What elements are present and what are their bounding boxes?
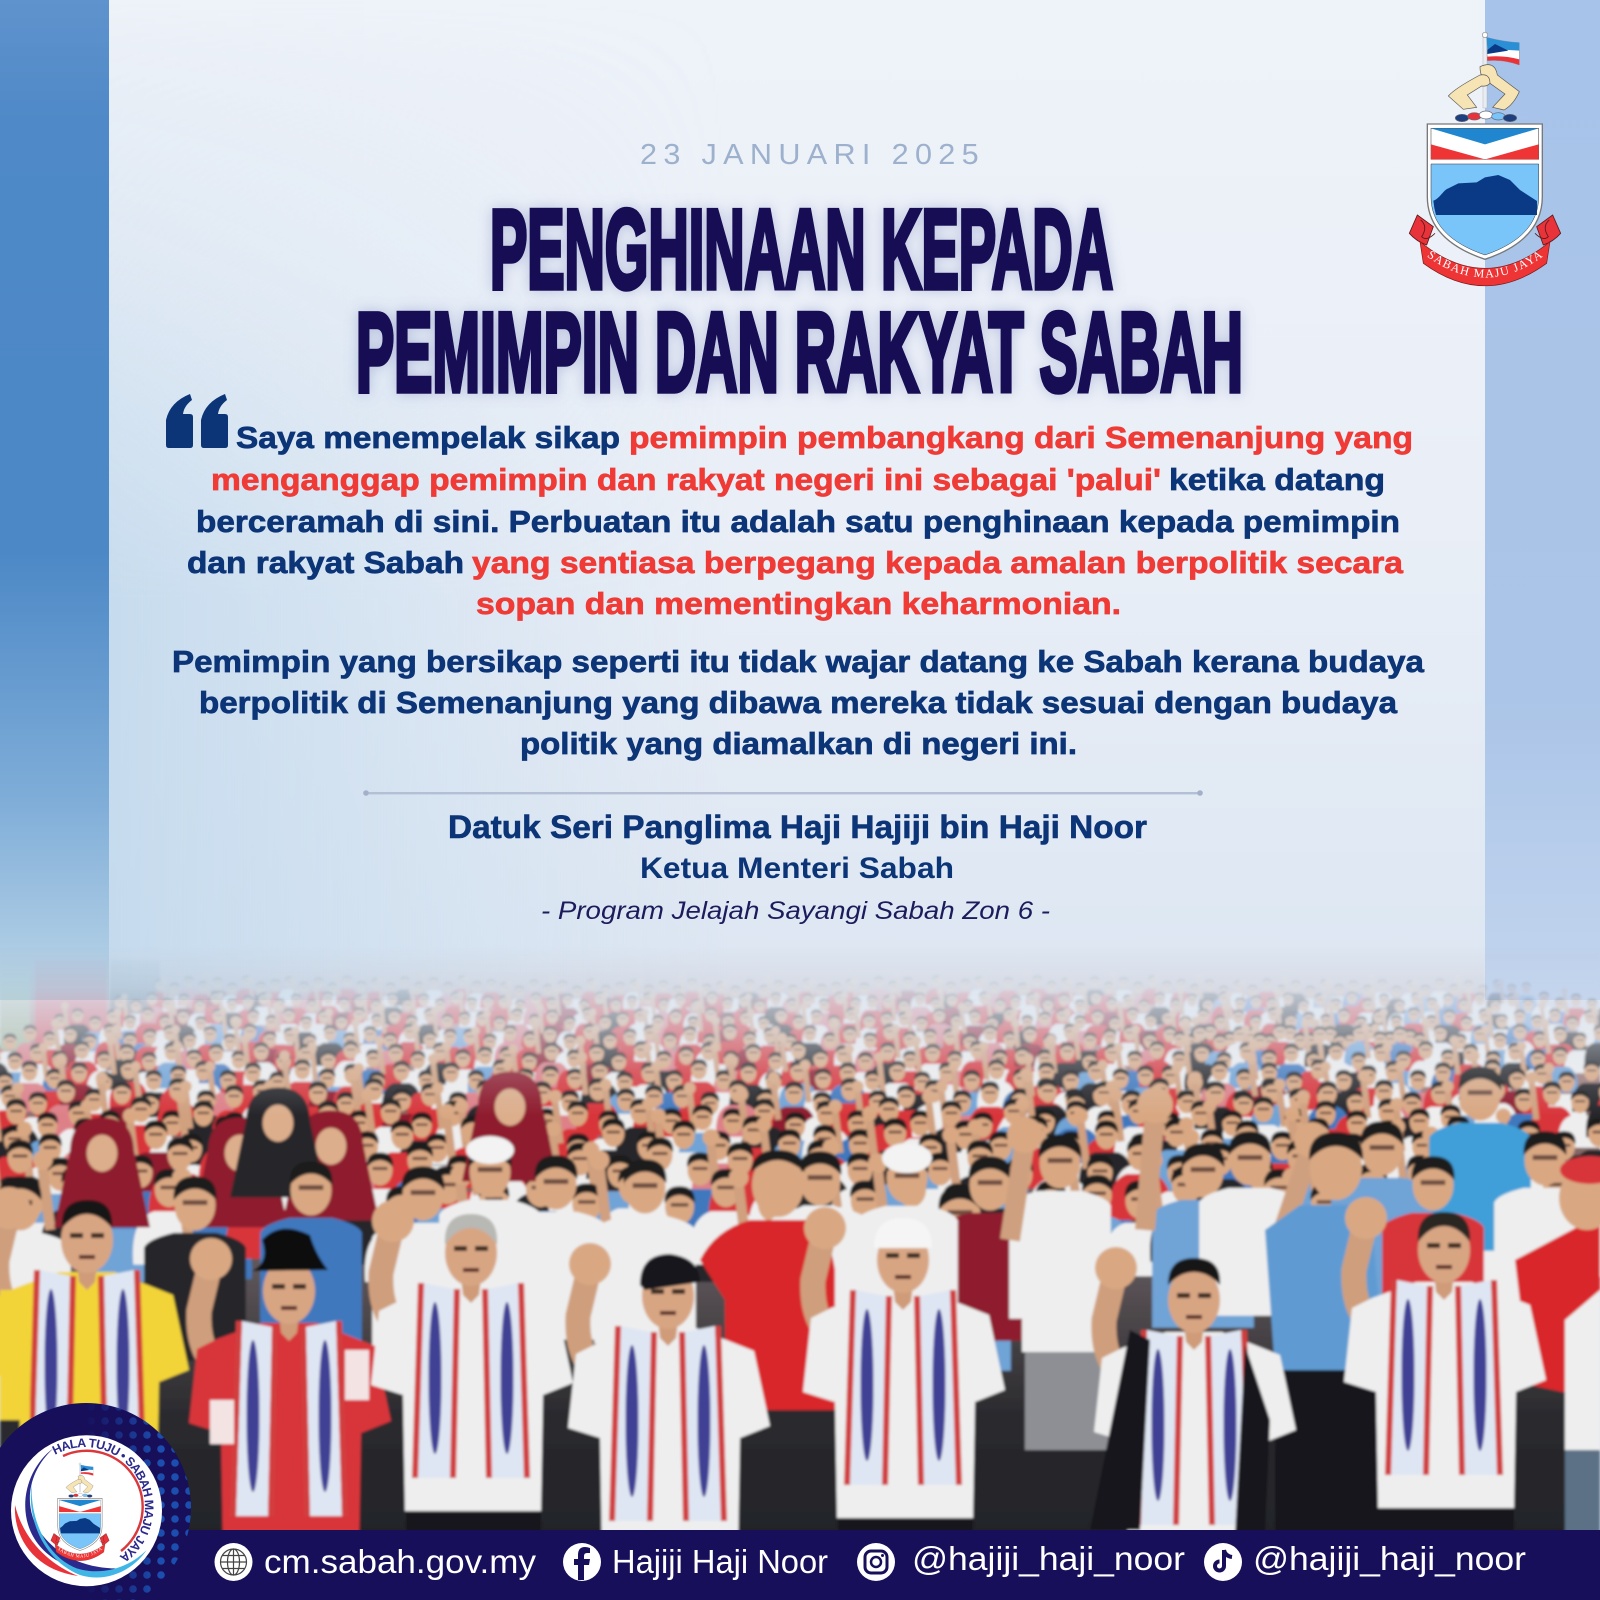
arms holding pole	[1448, 65, 1519, 110]
quote paragraph one: yang sentiasa berpegang kepada amalan berpolitik secara	[472, 546, 1404, 580]
footer: facebook: Hajiji Haji Noor	[612, 1543, 828, 1580]
hijab women	[54, 1071, 558, 1227]
quote paragraph one: berceramah di sini. Perbuatan itu adalah satu penghinaan kepada pemimpin	[196, 505, 1400, 539]
front row leaders	[0, 1187, 1546, 1600]
teal shirt man	[1429, 1066, 1531, 1251]
quote paragraph two: Pemimpin yang bersikap seperti itu tidak wajar datang ke Sabah kerana budaya	[172, 645, 1425, 679]
leader in white shirt white cap	[803, 1207, 1005, 1570]
quote paragraph one	[187, 421, 1413, 621]
leader with black vest	[1090, 1246, 1298, 1530]
blue shirt man	[1265, 1132, 1385, 1535]
speaker role: Ketua Menteri Sabah	[640, 852, 954, 885]
date: 23 JANUARI 2025	[640, 139, 985, 171]
title	[356, 187, 1243, 415]
speaker name: Datuk Seri Panglima Haji Hajiji bin Haji Noor	[448, 809, 1147, 845]
back crowd rows	[0, 970, 1600, 1282]
quote paragraph one: Saya menempelak sikap	[236, 421, 620, 455]
motto ribbon	[1420, 241, 1550, 286]
footer: website: cm.sabah.gov.my	[264, 1543, 537, 1580]
motto ribbon: SABAH MAJU JAYA	[1428, 251, 1543, 278]
divider	[363, 790, 1203, 796]
leader in yellow shirt	[0, 1184, 191, 1434]
quote paragraph two	[172, 645, 1425, 761]
leader in white shirt right	[1344, 1197, 1546, 1560]
photo base tones	[0, 945, 1600, 1535]
emblem: Sabah coat of arms	[1408, 32, 1562, 286]
footer: tiktok: @hajiji_haji_noor	[1253, 1540, 1526, 1577]
quote paragraph one: dan rakyat Sabah	[187, 546, 464, 580]
event note: - Program Jelajah Sayangi Sabah Zon 6 -	[541, 897, 1050, 925]
leader in red batik with black hat	[184, 1227, 393, 1530]
quote paragraph two: berpolitik di Semenanjung yang dibawa mereka tidak sesuai dengan budaya	[199, 686, 1398, 720]
flag	[1482, 32, 1519, 108]
footer bar	[0, 1530, 1600, 1600]
ribbon curls	[1409, 215, 1561, 245]
shield	[1427, 124, 1542, 259]
leader in white shirt navy cap	[564, 1242, 772, 1530]
leader in white shirt grey hair	[371, 1200, 573, 1563]
crowd photo	[0, 964, 1600, 1530]
cap and arm details second row	[466, 1087, 1330, 1450]
quote mark	[166, 394, 228, 448]
second row people	[0, 1121, 1596, 1371]
round logo: Hala Tuju Sabah Maju Jaya	[0, 1403, 191, 1600]
crest beads	[1455, 111, 1517, 122]
quote paragraph one: pemimpin pembangkang dari Semenanjung yang	[629, 421, 1413, 455]
quote paragraph one: menganggap pemimpin dan rakyat negeri ini sebagai 'palui'	[211, 463, 1161, 497]
shield lower with mountain	[1431, 164, 1539, 255]
quote paragraph two: politik yang diamalkan di negeri ini.	[520, 727, 1077, 761]
mini emblem	[51, 1463, 109, 1561]
shield chief	[1431, 128, 1539, 159]
red shirt man	[700, 1150, 835, 1410]
footer: instagram	[857, 1540, 1185, 1581]
quote paragraph one: sopan dan mementingkan keharmonian.	[476, 587, 1121, 621]
quote paragraph one: ketika datang	[1169, 463, 1385, 497]
round logo: Hala Tuju Sabah Maju Jaya: HALA TUJU • SABAH MAJU JAYA	[52, 1438, 154, 1561]
footer: instagram: @hajiji_haji_noor	[912, 1540, 1185, 1577]
far right red shirt and grey man	[1515, 1156, 1600, 1535]
